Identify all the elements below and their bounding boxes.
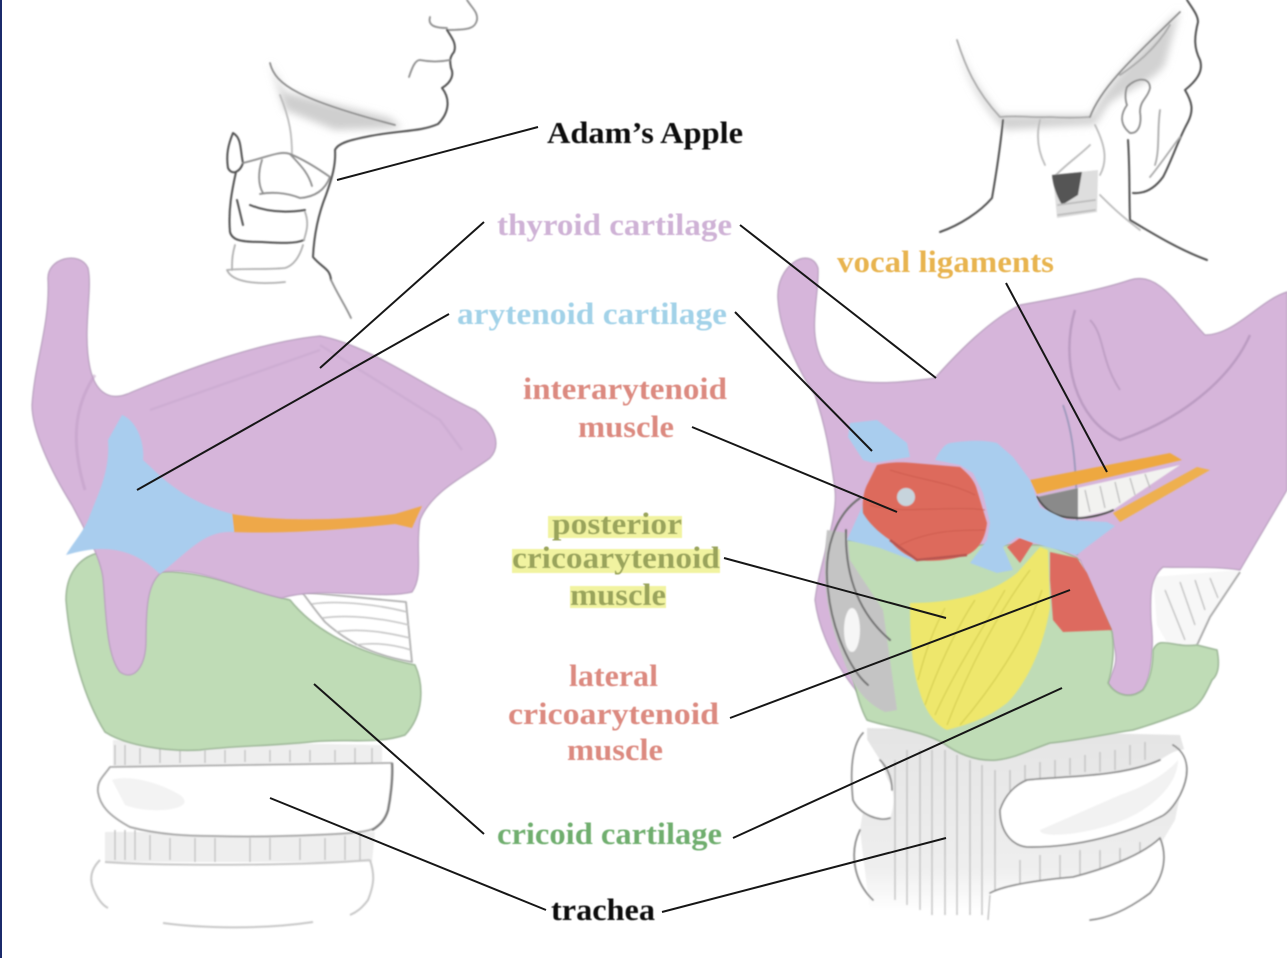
label: posterior cricoarytenoid muscle: posterior	[552, 506, 682, 541]
label: posterior cricoarytenoid muscle: cricoarytenoid	[512, 540, 720, 575]
label: trachea: trachea	[551, 892, 656, 927]
label: posterior cricoarytenoid muscle	[512, 506, 720, 612]
label: Adam's Apple: Adam’s Apple	[547, 115, 743, 150]
sketch: left profile head and neck	[227, 0, 477, 318]
label: lateral cricoarytenoid muscle: muscle	[567, 732, 663, 767]
lateral cricoarytenoid muscle	[1007, 538, 1112, 632]
right vocal ligaments	[1030, 453, 1210, 522]
right cricoid cartilage	[839, 540, 1218, 760]
right arytenoid cartilage	[847, 420, 1115, 573]
label: interarytenoid muscle: muscle	[578, 409, 674, 444]
left cricoid cartilage	[66, 553, 421, 750]
left arytenoid cartilage	[66, 415, 234, 574]
left trachea	[91, 592, 412, 927]
left vocal ligament	[232, 506, 422, 533]
label: interarytenoid muscle	[523, 371, 727, 444]
interarytenoid muscle	[863, 462, 987, 561]
posterior cricoarytenoid muscle	[910, 547, 1050, 730]
label: cricoid cartilage: cricoid cartilage	[497, 816, 722, 851]
right thyroid inner detail	[1063, 310, 1250, 555]
label: interarytenoid muscle: interarytenoid	[523, 371, 727, 406]
label: lateral cricoarytenoid muscle: cricoarytenoid	[508, 696, 719, 731]
right thyroid cartilage	[778, 258, 1287, 700]
label: arytenoid cartilage: arytenoid cartilage	[457, 296, 727, 331]
label: lateral cricoarytenoid muscle: lateral	[569, 658, 658, 693]
label: thyroid cartilage: thyroid cartilage	[497, 207, 732, 242]
label: lateral cricoarytenoid muscle	[508, 658, 719, 767]
right grey shaded ring	[825, 498, 897, 712]
leader lines	[137, 127, 1107, 912]
label: vocal ligaments: vocal ligaments	[837, 244, 1054, 279]
left thyroid cartilage	[32, 258, 496, 675]
label: posterior cricoarytenoid muscle: muscle	[570, 577, 666, 612]
right trachea	[852, 570, 1240, 925]
sketch: right rear head and neck	[940, 0, 1207, 260]
